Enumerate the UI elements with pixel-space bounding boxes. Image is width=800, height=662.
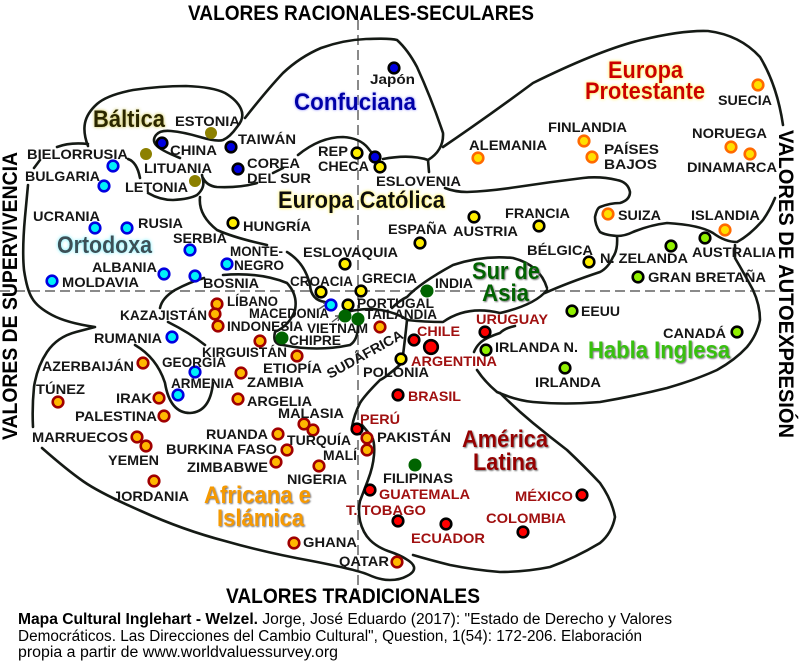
country: Colombia <box>486 510 566 537</box>
arrow: Macedonia pointer <box>319 303 328 309</box>
country: Etiopía: ETIOPÍA <box>263 360 322 376</box>
country: Malí <box>323 445 372 463</box>
country: Australia <box>692 233 776 260</box>
country: Brasil: BRASIL <box>408 388 461 404</box>
country: China <box>157 138 217 158</box>
country: Croacia <box>290 273 353 297</box>
country: Perú: PERÚ <box>360 410 400 427</box>
country: Yemen <box>108 441 159 468</box>
region name: Ortodoxa: Ortodoxa <box>57 232 153 259</box>
region name: Africana e Islámica: Islámica <box>217 505 305 532</box>
country: Guatemala: GUATEMALA <box>379 486 470 502</box>
country: Grecia <box>356 270 417 296</box>
country: Irlanda N.: IRLANDA N. <box>495 339 578 355</box>
country: Túnez: TÚNEZ <box>36 380 85 397</box>
region name: Habla Inglesa: Habla Inglesa <box>588 337 731 364</box>
country: Turquía <box>287 425 351 448</box>
country: Argentina: ARGENTINA <box>411 353 497 369</box>
country: Montenegro <box>222 243 284 273</box>
country: Filipinas: FILIPINAS <box>383 470 453 486</box>
country: Georgia <box>162 354 226 377</box>
country: Dinamarca: DINAMARCA <box>687 159 777 175</box>
country: Trinidad y Tobago: T. TOBAGO <box>346 502 426 518</box>
country: Eslovenia <box>375 162 461 189</box>
country: Canadá: CANADÁ <box>663 325 726 341</box>
region name: Sur de Asia: Sur de <box>472 258 540 285</box>
country: Vietnam: VIETNAM <box>307 320 368 336</box>
source caption: Democráticos. Las Direcciones del Cambio Cultural", Question, 1(54): 172-206. Elaboración <box>18 628 642 645</box>
country: Polonia <box>363 354 429 380</box>
region name: Sur de Asia: Asia <box>482 280 530 307</box>
country: Serbia <box>173 230 227 255</box>
country: Bélgica <box>527 242 594 267</box>
country: Grecia: GRECIA <box>362 270 417 286</box>
country: Japón: Japón <box>370 71 415 87</box>
country: Macedonia: MACEDONIA <box>249 305 329 321</box>
source caption: propia a partir de www.worldvaluessurvey.org <box>18 644 338 661</box>
country: Francia: FRANCIA <box>505 205 570 221</box>
country: Turquía: TURQUÍA <box>287 432 351 448</box>
country: Moldavia: MOLDAVIA <box>62 274 139 290</box>
country: Jordania: JORDANIA <box>113 488 189 504</box>
country: Montenegro: NEGRO <box>234 257 284 273</box>
country: Japón <box>370 63 415 87</box>
country: Bélgica: BÉLGICA <box>527 242 593 258</box>
country: Filipinas <box>383 459 453 486</box>
country: Francia <box>505 205 570 231</box>
country: Ruanda: RUANDA <box>206 426 268 442</box>
country: Rumania: RUMANIA <box>94 330 162 346</box>
country: Austria: AUSTRIA <box>453 223 518 239</box>
country: Rep Checa <box>318 143 369 174</box>
country: Eslovenia: ESLOVENIA <box>376 173 461 189</box>
country: Armenia <box>171 375 234 400</box>
arrow: Vietnam pointer <box>332 316 340 322</box>
country: Uruguay <box>476 311 549 337</box>
country: Letonia <box>125 176 200 195</box>
country: Zambia <box>236 368 304 390</box>
country: Polonia: POLONIA <box>363 364 429 380</box>
country: Noruega: NORUEGA <box>692 125 767 141</box>
country: Estonia <box>175 113 240 138</box>
country: Líbano: LÍBANO <box>227 293 278 309</box>
country: Albania: ALBANIA <box>92 259 157 275</box>
country: Serbia: SERBIA <box>173 230 227 246</box>
region name: Báltica: Báltica <box>93 106 166 133</box>
country: Taiwán <box>226 131 296 152</box>
country: Kazajistán: KAZAJISTÁN <box>120 307 207 323</box>
country: Trinidad y Tobago <box>346 502 426 526</box>
country: Tailandia <box>352 306 437 325</box>
region name: Confuciana: Confuciana <box>294 89 417 116</box>
country: Bosnia: BOSNIA <box>203 275 259 291</box>
country: España <box>388 220 447 248</box>
country: Finlandia <box>548 119 627 146</box>
region name: Europa Protestante: Europa <box>608 57 684 84</box>
country: Perú <box>352 410 400 434</box>
region name: América Latina: Latina <box>473 449 538 476</box>
country: Vietnam <box>307 310 368 336</box>
country: Croacia: CROACIA <box>290 273 353 289</box>
country: Burkina Faso: BURKINA FASO <box>166 441 277 457</box>
country: Hungría: HUNGRÍA <box>243 218 311 234</box>
country: Austria <box>453 212 518 239</box>
country: Nigeria <box>287 461 347 487</box>
country: China: CHINA <box>170 142 217 158</box>
country: Chile: CHILE <box>417 323 460 339</box>
country: Argentina <box>411 340 497 369</box>
country: EEUU: EEUU <box>581 303 620 319</box>
country: Suecia: SUECIA <box>718 92 772 108</box>
country: Marruecos: MARRUECOS <box>32 429 128 445</box>
axis title: top: VALORES RACIONALES-SECULARES <box>188 2 534 25</box>
country: Bulgaria <box>25 168 109 191</box>
region name: Africana e Islámica: Africana e <box>204 482 311 509</box>
country: Armenia: ARMENIA <box>171 375 234 391</box>
country: Etiopía <box>263 351 322 376</box>
country: Ecuador: ECUADOR <box>411 530 485 546</box>
country: Rep Checa: CHECA <box>318 158 369 174</box>
country: Malasia <box>278 405 344 429</box>
country: India: INDIA <box>435 275 473 291</box>
region name: América Latina <box>462 426 549 476</box>
country: Jordania <box>113 476 189 504</box>
country: Alemania <box>469 137 547 163</box>
country: Estonia: ESTONIA <box>175 113 240 129</box>
country: Islandia: ISLANDIA <box>691 207 760 223</box>
region name: Europa Protestante <box>585 57 705 105</box>
country: Dinamarca <box>687 149 777 175</box>
country: Letonia: LETONIA <box>125 179 188 195</box>
country: Qatar: QATAR <box>339 553 389 569</box>
country: Nueva Zelanda: N. ZELANDA <box>600 250 688 266</box>
country: Lituania <box>140 148 212 176</box>
country: Uruguay: URUGUAY <box>476 311 549 327</box>
country: Argelia: ARGELIA <box>247 393 312 409</box>
country: Zimbabwe: ZIMBABWE <box>187 459 268 475</box>
country: Yemen: YEMEN <box>108 452 159 468</box>
country: Bulgaria: BULGARIA <box>25 168 100 184</box>
country: Rep Checa: REP <box>318 143 348 159</box>
region name: Europa Protestante: Protestante <box>585 78 705 105</box>
country: Georgia: GEORGIA <box>162 354 226 370</box>
country: Bosnia <box>190 271 259 291</box>
country: Sudáfrica: SUDÁFRICA <box>324 326 406 382</box>
country: India <box>421 275 473 297</box>
region boundary curves <box>23 31 783 580</box>
country: Países Bajos: BAJOS <box>604 156 657 172</box>
country: Malasia: MALASIA <box>278 405 344 421</box>
country: Pakistán: PAKISTÁN <box>377 429 451 445</box>
country: Noruega <box>692 125 767 152</box>
country: Montenegro: MONTE- <box>230 243 283 259</box>
country: Chipre: CHIPRE <box>289 332 341 348</box>
region name: Africana e Islámica <box>204 482 311 532</box>
country: Indonesia: INDONESIA <box>227 318 303 334</box>
country: Ecuador <box>411 519 485 546</box>
country: Alemania: ALEMANIA <box>469 137 547 153</box>
country: Albania <box>92 259 169 279</box>
country: Bielorrusia: BIELORRUSIA <box>27 146 128 162</box>
country: Colombia: COLOMBIA <box>486 510 566 526</box>
country: Azerbaiján: AZERBAIJÁN <box>42 358 134 374</box>
country: Eslovaquia: ESLOVAQUIA <box>303 244 398 260</box>
region name: Sur de Asia <box>472 258 540 307</box>
country: Rusia <box>122 215 183 233</box>
axis title: right: VALORES DE AUTOEXPRESIÓN <box>774 130 798 438</box>
country: Países Bajos <box>587 141 659 172</box>
country: Bielorrusia <box>27 146 128 171</box>
dot: blue near Rep Checa <box>370 152 380 162</box>
country: Ucrania <box>33 208 100 233</box>
country: México: MÉXICO <box>515 488 573 504</box>
country: Irlanda <box>535 363 601 390</box>
country: Gran Bretaña: GRAN BRETAÑA <box>648 268 766 285</box>
country: Malí: MALÍ <box>323 447 358 463</box>
country: Corea del Sur <box>233 155 311 186</box>
country: Ghana: GHANA <box>303 534 357 550</box>
country: Zambia: ZAMBIA <box>247 374 304 390</box>
country: Nigeria: NIGERIA <box>287 471 347 487</box>
country: Países Bajos: PAÍSES <box>604 141 659 157</box>
country: Suiza: SUIZA <box>618 207 661 223</box>
country: Palestina: PALESTINA <box>75 408 157 424</box>
region name: Europa Católica: Europa Católica <box>278 187 446 214</box>
country: Nueva Zelanda <box>600 241 688 266</box>
country: Corea del Sur: DEL SUR <box>247 170 311 186</box>
country: Kirguistán: KIRGUISTÁN <box>202 344 287 360</box>
country: Taiwán: TAIWÁN <box>238 131 296 147</box>
source caption: Mapa Cultural Inglehart - Welzel. Jorge, José Eduardo (2017): "Estado de Derecho y Valores <box>18 611 672 628</box>
country: Irak: IRAK <box>116 390 152 406</box>
country: Portugal: PORTUGAL <box>357 295 434 311</box>
country: Rusia: RUSIA <box>138 215 183 231</box>
region name: América Latina: América <box>462 426 549 453</box>
country: Finlandia: FINLANDIA <box>548 119 627 135</box>
country: Kirguistán <box>202 336 287 360</box>
country: Irlanda: IRLANDA <box>535 374 601 390</box>
country: Tailandia: TAILANDIA <box>365 306 437 322</box>
country: Corea del Sur: COREA <box>247 155 300 171</box>
country: Islandia <box>691 207 760 235</box>
country: Túnez <box>36 380 85 407</box>
country: Eslovaquia <box>303 244 398 269</box>
country: Suecia <box>718 80 772 108</box>
country: España: ESPAÑA <box>388 220 447 237</box>
country: Australia: AUSTRALIA <box>692 244 776 260</box>
country: Lituania: LITUANIA <box>144 160 212 176</box>
source caption <box>18 611 672 661</box>
country: Chile <box>409 323 460 345</box>
country: Ucrania: UCRANIA <box>33 208 100 224</box>
axis title: bottom: VALORES TRADICIONALES <box>226 585 480 608</box>
